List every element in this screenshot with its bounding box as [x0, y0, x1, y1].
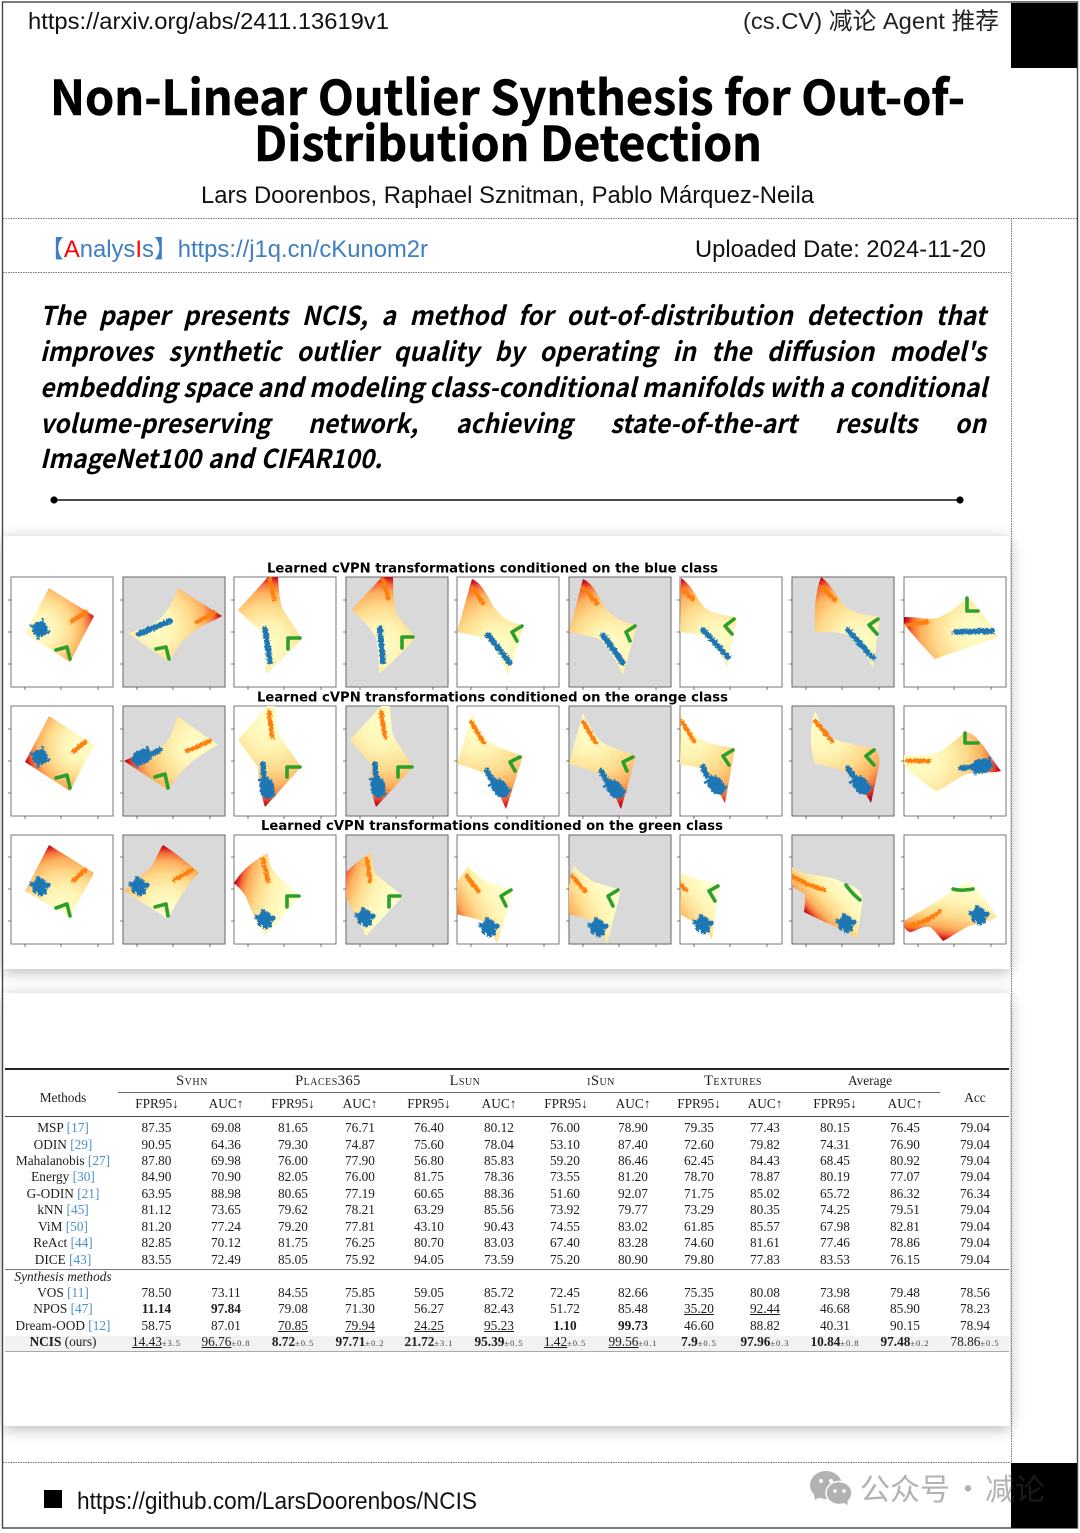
plot: green class 9 [901, 835, 1006, 947]
plot: blue class 8 [789, 577, 894, 690]
plot: orange class 3 [231, 706, 336, 819]
row: ViM: ViM [50] [38, 1219, 88, 1234]
row: NPOS: 92.44 [750, 1301, 780, 1316]
row: VOS: 73.11 [211, 1285, 241, 1300]
row: ViM: 61.85 [684, 1219, 714, 1234]
arXiv link: https://arxiv.org/abs/2411.13619v1 [28, 8, 389, 34]
row: Energy: Energy [30] [31, 1169, 95, 1184]
row: ReAct: 67.40 [550, 1235, 580, 1250]
row: Mahalanobis: 87.80 [142, 1153, 171, 1168]
row: ViM: 85.57 [750, 1219, 780, 1234]
plot: blue class 2 [120, 577, 225, 690]
row: MSP: 69.08 [211, 1120, 241, 1135]
row: Dream-OOD: 87.01 [211, 1318, 241, 1332]
plot: orange class 1 [8, 706, 113, 819]
row: NPOS: 46.68 [820, 1301, 850, 1316]
plot: green class 7 [677, 835, 782, 947]
row: Dream-OOD: 58.75 [142, 1318, 171, 1332]
row: NPOS: 85.48 [618, 1301, 648, 1316]
row: Energy: 81.20 [618, 1169, 648, 1184]
table header: iSun [587, 1073, 615, 1089]
plot: orange class 8 [789, 706, 894, 819]
row: MSP: 76.40 [414, 1120, 444, 1135]
table header: AUC↑ [616, 1096, 650, 1111]
row: ODIN: 79.82 [750, 1136, 780, 1152]
row: NCIS ours: 99.56±0.1 [608, 1334, 657, 1349]
abstract text: embedding space and modeling class-conditional manifolds with a conditional [40, 368, 987, 405]
panel: figure of learned cVPN transformations [3, 536, 1010, 969]
row: Energy: 78.36 [484, 1169, 514, 1184]
abstract text: improves synthetic outlier quality by operating in the diffusion model's [40, 332, 986, 369]
plot: blue class 4 [343, 577, 448, 690]
row: Dream-OOD: 79.94 [345, 1318, 375, 1332]
table header: AUC↑ [343, 1096, 377, 1111]
row: ReAct: 81.61 [750, 1235, 780, 1250]
row: ODIN: 53.10 [550, 1136, 580, 1152]
row: kNN: 73.65 [211, 1202, 241, 1217]
title: blue class: Learned cVPN transformations conditioned on the blue class [267, 560, 718, 576]
row: Dream-OOD: 88.82 [750, 1318, 780, 1332]
row: ODIN: ODIN [29] [34, 1136, 92, 1152]
row: Mahalanobis: 68.45 [820, 1153, 850, 1168]
row: ReAct: 83.03 [484, 1235, 514, 1250]
row: NPOS: 71.30 [345, 1301, 375, 1316]
plot: green class 6 [566, 835, 671, 947]
row: ReAct: 80.70 [414, 1235, 444, 1250]
row: G-ODIN: 92.07 [618, 1186, 648, 1201]
plot: green class 1 [8, 835, 113, 947]
table header: Svhn [176, 1073, 208, 1089]
row: G-ODIN: 76.34 [960, 1186, 990, 1201]
row: Energy: 78.70 [684, 1169, 714, 1184]
row: ODIN: 90.95 [142, 1136, 171, 1152]
row: DICE: 85.05 [278, 1252, 308, 1267]
row: kNN: 80.35 [750, 1202, 780, 1217]
black corner block top [1011, 3, 1077, 68]
abstract text: The paper presents NCIS, a method for out-of-distribution detection that [40, 296, 986, 333]
row: ViM: 77.24 [211, 1219, 241, 1234]
watermark [810, 1465, 1045, 1509]
row: ReAct: 81.75 [278, 1235, 308, 1250]
plot: orange class 4 [343, 706, 448, 819]
row: ODIN: 74.87 [345, 1136, 375, 1152]
row: G-ODIN: G-ODIN [21] [27, 1186, 99, 1201]
abstract text [40, 296, 990, 476]
plot: green class 4 [343, 835, 448, 947]
black corner block bottom [1011, 1463, 1077, 1528]
row: ODIN: 76.90 [890, 1136, 920, 1152]
table header: FPR95↓ [677, 1096, 721, 1111]
row: MSP: 76.71 [345, 1120, 375, 1135]
row: ReAct: 77.46 [820, 1235, 850, 1250]
row: ViM: 83.02 [618, 1219, 648, 1234]
row: ViM: 90.43 [484, 1219, 514, 1234]
watermark: light part with icon and text [810, 1465, 1011, 1509]
row: Dream-OOD: 90.15 [890, 1318, 920, 1332]
row: MSP: 78.90 [618, 1120, 648, 1135]
row: kNN: 63.29 [414, 1202, 444, 1217]
row: ViM: 67.98 [820, 1219, 850, 1234]
row: Mahalanobis: 69.98 [211, 1153, 241, 1168]
row: ViM: 74.55 [550, 1219, 580, 1234]
title: green class: Learned cVPN transformations conditioned on the green class [261, 818, 723, 834]
plot: blue class 6 [566, 577, 671, 690]
row: ReAct: 78.86 [890, 1235, 920, 1250]
row: kNN: 79.77 [618, 1202, 648, 1217]
row: kNN: 79.04 [960, 1202, 990, 1217]
row: VOS: 85.72 [484, 1285, 514, 1300]
row: Mahalanobis: 85.83 [484, 1153, 514, 1168]
table header: FPR95↓ [135, 1096, 179, 1111]
title: orange class: Learned cVPN transformations conditioned on the orange class [257, 690, 728, 706]
title line 1: Non-Linear Outlier Synthesis for Out-of- [50, 59, 965, 129]
row: VOS: 72.45 [550, 1285, 580, 1300]
plot: blue class 5 [454, 577, 559, 690]
row: Dream-OOD: 40.31 [820, 1318, 850, 1332]
row: MSP: 76.45 [890, 1120, 920, 1135]
row: Mahalanobis: 84.43 [750, 1153, 780, 1168]
plot: blue class 1 [8, 577, 113, 690]
row: G-ODIN: 80.65 [278, 1186, 308, 1201]
row: Dream-OOD: 95.23 [484, 1318, 514, 1332]
row: VOS: 59.05 [414, 1285, 444, 1300]
row: ViM: 43.10 [414, 1219, 444, 1234]
row: Synthesis methods label: Synthesis methods [14, 1269, 112, 1284]
row: G-ODIN: 60.65 [414, 1186, 444, 1201]
row: ODIN: 64.36 [211, 1136, 241, 1152]
analysis link: 【AnalysIs】https://j1q.cn/cKunom2r [40, 236, 428, 263]
row: G-ODIN: 88.98 [211, 1186, 241, 1201]
authors: Lars Doorenbos, Raphael Sznitman, Pablo Márquez-Neila [201, 182, 815, 209]
row: G-ODIN: 71.75 [684, 1186, 714, 1201]
row: ODIN: 79.30 [278, 1136, 308, 1152]
row: ODIN: 87.40 [618, 1136, 648, 1152]
row: Mahalanobis: 62.45 [684, 1153, 714, 1168]
header text [28, 8, 999, 263]
row: NPOS: 78.23 [960, 1301, 990, 1316]
row: Energy: 78.87 [750, 1169, 780, 1184]
row: NPOS: 11.14 [142, 1301, 171, 1316]
row: NCIS ours: 78.86±0.5 [950, 1334, 999, 1349]
row: DICE: 94.05 [414, 1252, 444, 1267]
row: ReAct [33, 1235, 990, 1250]
row: MSP: MSP [17] [37, 1120, 89, 1135]
row: DICE [35, 1252, 990, 1267]
table header: AUC↑ [888, 1096, 922, 1111]
row: DICE: 79.80 [684, 1252, 714, 1267]
row: ViM: 79.04 [960, 1219, 990, 1234]
divider with end dots [50, 496, 964, 504]
row: MSP: 79.35 [684, 1120, 714, 1135]
row: ReAct: 83.28 [618, 1235, 648, 1250]
plot: blue class 7 [677, 577, 782, 690]
row: MSP: 81.65 [278, 1120, 308, 1135]
row: Energy: 73.55 [550, 1169, 580, 1184]
table header [40, 1073, 986, 1111]
table header: Textures [704, 1073, 762, 1089]
row: NCIS ours: 8.72±0.5 [272, 1334, 314, 1349]
watermark: light part with icon and text: · [953, 1465, 983, 1509]
row: DICE: 76.15 [890, 1252, 920, 1267]
row: ViM: 79.20 [278, 1219, 308, 1234]
row: Mahalanobis: 56.80 [414, 1153, 444, 1168]
row: Energy: 84.90 [142, 1169, 171, 1184]
row: Dream-OOD: Dream-OOD [12] [16, 1318, 110, 1332]
row: VOS: 78.56 [960, 1285, 990, 1300]
row: ODIN [34, 1136, 990, 1152]
row: NCIS ours [30, 1334, 999, 1349]
row: G-ODIN: 77.19 [345, 1186, 375, 1201]
row: MSP: 79.04 [960, 1120, 990, 1135]
row: Dream-OOD [16, 1318, 990, 1332]
row: kNN: 81.12 [142, 1202, 171, 1217]
row: NPOS: 82.43 [484, 1301, 514, 1316]
row: Energy: 82.05 [278, 1169, 308, 1184]
row: VOS: 82.66 [618, 1285, 648, 1300]
plot: orange class 9 [901, 706, 1006, 819]
row: MSP: 80.15 [820, 1120, 850, 1135]
plot: blue class 9 [901, 577, 1006, 690]
table header: Places365 [295, 1073, 361, 1089]
row: NCIS ours: 14.43±3.5 [132, 1334, 181, 1349]
row: NCIS ours: 97.96±0.3 [740, 1334, 789, 1349]
row: DICE: 80.90 [618, 1252, 648, 1267]
row: NCIS ours: 96.76±0.8 [202, 1334, 250, 1349]
row: ODIN: 72.60 [684, 1136, 714, 1152]
panel: results table background [3, 993, 1010, 1426]
row: Dream-OOD: 24.25 [414, 1318, 444, 1332]
row: NCIS ours: 1.42±0.5 [544, 1334, 586, 1349]
row: G-ODIN: 88.36 [484, 1186, 514, 1201]
title line 2: Distribution Detection [254, 105, 762, 175]
row: G-ODIN: 63.95 [142, 1186, 171, 1201]
row: VOS: 80.08 [750, 1285, 780, 1300]
plot: blue class 3 [231, 577, 336, 690]
row: MSP: 76.00 [550, 1120, 580, 1135]
row: kNN: 73.29 [684, 1202, 714, 1217]
row: Mahalanobis: 80.92 [890, 1153, 920, 1168]
table header: Average [848, 1073, 892, 1088]
footer bullet [44, 1490, 62, 1508]
footer GitHub link: https://github.com/LarsDoorenbos/NCIS [77, 1488, 477, 1515]
row: Dream-OOD: 1.10 [553, 1318, 577, 1332]
row: VOS: 75.85 [345, 1285, 375, 1300]
plot: green class 5 [454, 835, 559, 947]
row: ODIN: 79.04 [960, 1136, 990, 1152]
row: Energy: 79.04 [960, 1169, 990, 1184]
row: ViM: 82.81 [890, 1219, 920, 1234]
row: ViM [38, 1219, 990, 1234]
row: ViM: 81.20 [142, 1219, 171, 1234]
row: Energy: 80.19 [820, 1169, 850, 1184]
row: G-ODIN: 65.72 [820, 1186, 850, 1201]
abstract text: volume-preserving network, achieving state-of-the-art results on [40, 404, 986, 441]
row: kNN: 85.56 [484, 1202, 514, 1217]
plot: orange class 5 [454, 706, 559, 819]
category tag: (cs.CV) 减论 Agent 推荐 [743, 8, 999, 34]
row: MSP: 80.12 [484, 1120, 514, 1135]
row: DICE: 73.59 [484, 1252, 514, 1267]
row: NPOS: 85.90 [890, 1301, 920, 1316]
row: kNN: 73.92 [550, 1202, 580, 1217]
row: NPOS: NPOS [47] [33, 1301, 93, 1316]
plot: green class 8 [789, 835, 894, 947]
row: VOS: 78.50 [142, 1285, 171, 1300]
row: ODIN: 74.31 [820, 1136, 850, 1152]
row: NCIS ours: 7.9±0.5 [681, 1334, 717, 1349]
uploaded date: Uploaded Date: 2024-11-20 [695, 236, 986, 263]
row: Mahalanobis: Mahalanobis [27] [16, 1153, 110, 1168]
row: NCIS ours: 97.71±0.2 [336, 1334, 384, 1349]
row: NCIS ours: 95.39±0.5 [474, 1334, 523, 1349]
row: ViM: 77.81 [345, 1219, 375, 1234]
row: ReAct: 74.60 [684, 1235, 714, 1250]
row: G-ODIN [27, 1186, 990, 1201]
row: NCIS ours: NCIS (ours) [30, 1334, 96, 1349]
table header: FPR95↓ [544, 1096, 588, 1111]
row: Mahalanobis: 76.00 [278, 1153, 308, 1168]
table header: FPR95↓ [813, 1096, 857, 1111]
row: NPOS [33, 1301, 990, 1316]
table: OOD detection results [5, 1068, 1009, 1352]
row: DICE: DICE [43] [35, 1252, 91, 1267]
row: kNN: kNN [45] [37, 1202, 89, 1217]
row: Energy [31, 1169, 990, 1184]
row: kNN [37, 1202, 990, 1217]
table header: Lsun [450, 1073, 480, 1089]
row: ReAct: 76.25 [345, 1235, 375, 1250]
row: Mahalanobis [16, 1153, 990, 1168]
row: G-ODIN: 85.02 [750, 1186, 780, 1201]
plot: green class 2 [120, 835, 225, 947]
table header: FPR95↓ [271, 1096, 315, 1111]
plot: orange class 2 [120, 706, 225, 819]
table header: FPR95↓ [407, 1096, 451, 1111]
row: DICE: 79.04 [960, 1252, 990, 1267]
row: MSP: 77.43 [750, 1120, 780, 1135]
row: NCIS ours: 10.84±0.8 [810, 1334, 859, 1349]
row: Mahalanobis: 79.04 [960, 1153, 990, 1168]
row: NCIS ours: 21.72±3.1 [404, 1334, 453, 1349]
row: G-ODIN: 51.60 [550, 1186, 580, 1201]
row: Energy: 76.00 [345, 1169, 375, 1184]
row: Dream-OOD: 78.94 [960, 1318, 990, 1332]
row: VOS: 84.55 [278, 1285, 308, 1300]
row: DICE: 75.92 [345, 1252, 375, 1267]
table header: AUC↑ [209, 1096, 243, 1111]
row: kNN: 79.51 [890, 1202, 920, 1217]
row: NPOS: 97.84 [211, 1301, 241, 1316]
row: VOS [37, 1285, 990, 1300]
row: Mahalanobis: 77.90 [345, 1153, 375, 1168]
row: MSP [37, 1120, 990, 1135]
row: VOS: 79.48 [890, 1285, 920, 1300]
table header: Acc [964, 1090, 986, 1105]
row: ReAct: 82.85 [142, 1235, 171, 1250]
row: NPOS: 51.72 [550, 1301, 580, 1316]
row: kNN: 74.25 [820, 1202, 850, 1217]
table header: AUC↑ [748, 1096, 782, 1111]
row: VOS: 75.35 [684, 1285, 714, 1300]
row: DICE: 83.55 [142, 1252, 171, 1267]
row: NPOS: 56.27 [414, 1301, 444, 1316]
row: ReAct: 70.12 [211, 1235, 241, 1250]
row: VOS: 73.98 [820, 1285, 850, 1300]
row: NPOS: 35.20 [684, 1301, 714, 1316]
row: ODIN: 75.60 [414, 1136, 444, 1152]
row: VOS: VOS [11] [37, 1285, 89, 1300]
table header: Methods [40, 1090, 86, 1105]
row: Mahalanobis: 86.46 [618, 1153, 648, 1168]
row: kNN: 78.21 [345, 1202, 375, 1217]
plot: green class 3 [231, 835, 336, 947]
row: Mahalanobis: 59.20 [550, 1153, 580, 1168]
row: MSP: 87.35 [142, 1120, 171, 1135]
plot: orange class 7 [677, 706, 782, 819]
table header: AUC↑ [482, 1096, 516, 1111]
row: Energy: 70.90 [211, 1169, 241, 1184]
abstract text: ImageNet100 and CIFAR100. [40, 439, 382, 476]
row: Dream-OOD: 99.73 [618, 1318, 648, 1332]
row: Dream-OOD: 46.60 [684, 1318, 714, 1332]
watermark: light part with icon and text: 公众号 [860, 1465, 950, 1509]
row: DICE: 75.20 [550, 1252, 580, 1267]
row: Energy: 81.75 [414, 1169, 444, 1184]
row: DICE: 83.53 [820, 1252, 850, 1267]
row: kNN: 79.62 [278, 1202, 308, 1217]
row: DICE: 72.49 [211, 1252, 241, 1267]
row: ReAct: ReAct [44] [33, 1235, 93, 1250]
row: G-ODIN: 86.32 [890, 1186, 920, 1201]
row: DICE: 77.83 [750, 1252, 780, 1267]
row: NPOS: 79.08 [278, 1301, 308, 1316]
row: Dream-OOD: 70.85 [278, 1318, 308, 1332]
row: NCIS ours: 97.48±0.2 [880, 1334, 929, 1349]
row: Energy: 77.07 [890, 1169, 920, 1184]
row: ReAct: 79.04 [960, 1235, 990, 1250]
plot: orange class 6 [566, 706, 671, 819]
row: ODIN: 78.04 [484, 1136, 514, 1152]
